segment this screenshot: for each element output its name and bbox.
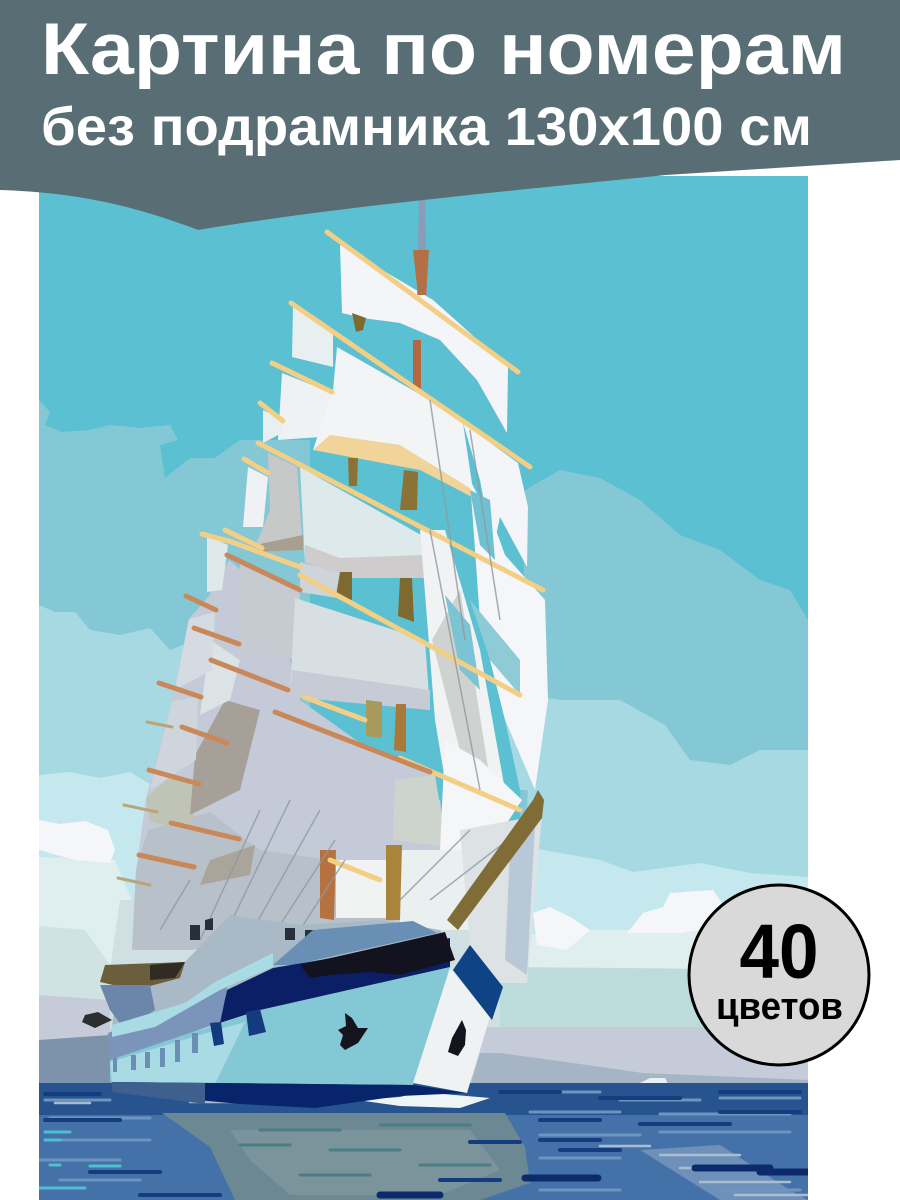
pale lower clouds [39,857,704,1033]
hull lower light strip [110,1022,245,1084]
bow blue stripe [453,945,503,1020]
title: Картина по номерам [41,9,846,90]
badge: 40 colours: цветов [716,986,843,1028]
hull body [110,967,450,1085]
rigging [160,400,540,940]
bowsprit [447,790,544,930]
wake [364,1094,490,1108]
anchor hole shape [338,1013,368,1050]
waterline [112,1082,467,1108]
badge: 40 colours: 40 [740,909,818,995]
white clouds [39,820,730,950]
stern shade [108,987,227,1060]
masts [320,200,429,920]
deck blue-grey [273,921,437,965]
bow white [413,968,490,1093]
sky background with cloud bands [39,176,808,1083]
header banner [0,0,900,230]
hull windows and ports [113,1009,266,1072]
painting: sailing ship on the sea [39,176,808,1200]
reflection of ship [162,1113,530,1200]
superstructure deck [112,915,442,1032]
waves highlights [640,1145,808,1200]
fore sails and jibs [420,530,504,783]
subtitle: без подрамника 130х100 см [41,97,812,157]
rear sails mass [132,560,447,950]
ship [82,200,548,1108]
hull black band [300,932,455,978]
sea [39,1083,808,1200]
main sails [340,245,508,433]
hull navy band [220,938,450,1023]
badge: 40 colours [689,885,869,1065]
light rail [112,953,273,1037]
yards [118,232,543,885]
bow anchor shape [448,1020,466,1056]
patches of sky through sails [445,595,480,690]
distant horizon hills [39,995,808,1086]
